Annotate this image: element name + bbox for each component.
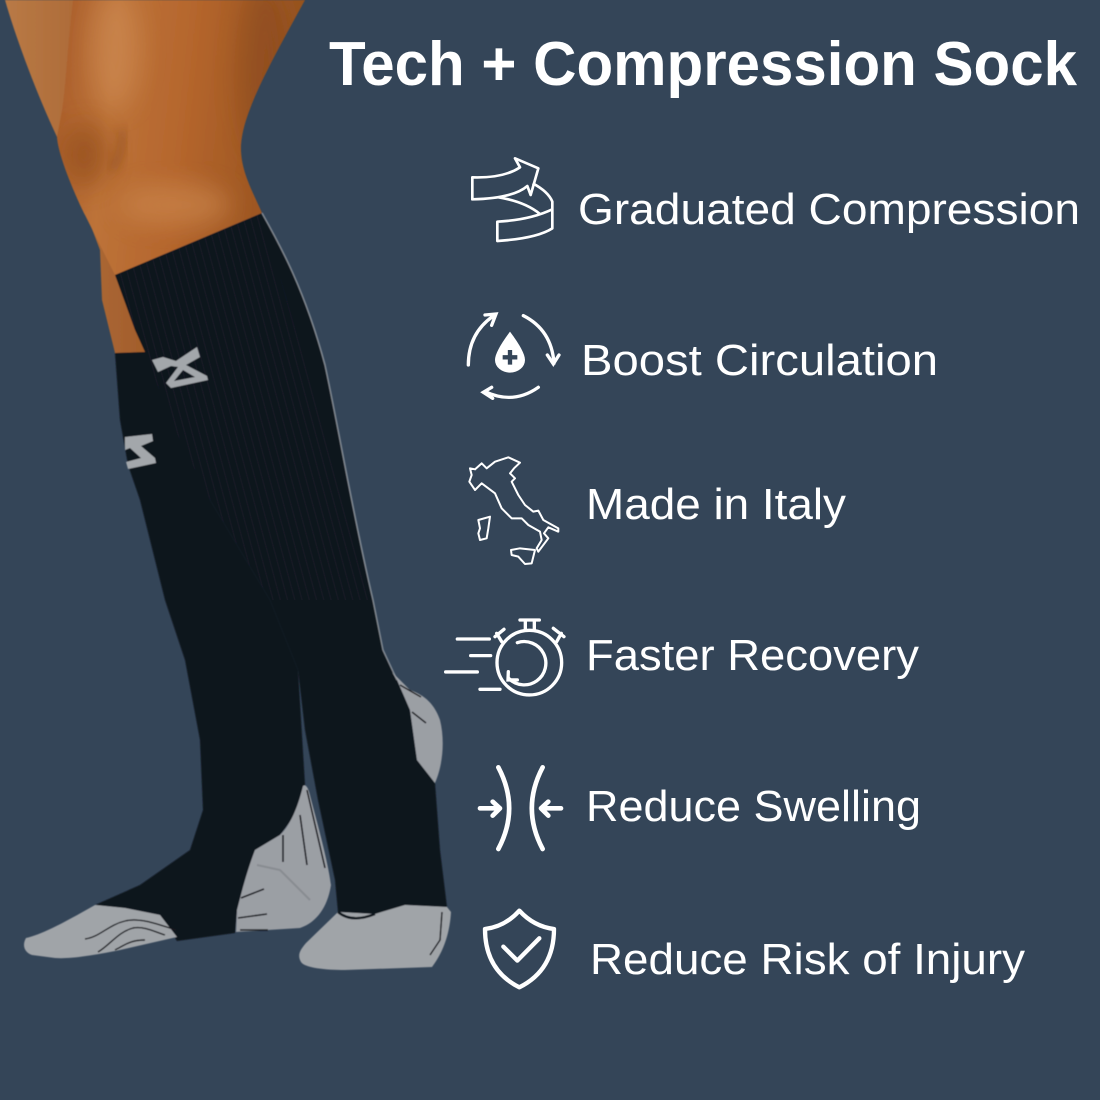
- front foot toe: [299, 905, 451, 970]
- label: made in italy: Made in Italy: [586, 480, 846, 529]
- feature: reduce risk of injury: [485, 911, 1025, 987]
- feature: faster recovery: [446, 620, 919, 695]
- feature: boost circulation: [468, 314, 938, 398]
- label: boost circulation: Boost Circulation: [581, 336, 938, 385]
- feature: graduated compression: [472, 158, 1080, 241]
- icon: shield with check: [485, 911, 554, 987]
- label: reduce swelling: Reduce Swelling: [586, 782, 921, 831]
- icon: inward arrows and curves: [480, 767, 561, 849]
- front sock: [115, 213, 447, 914]
- back leg skin: [5, 0, 160, 353]
- label: faster recovery: Faster Recovery: [586, 631, 919, 680]
- knit ribs: [115, 213, 373, 600]
- back sock: [95, 352, 305, 941]
- icon: stopwatch with speed lines: [446, 620, 564, 695]
- icon: map of italy: [469, 457, 558, 564]
- front foot heel: [392, 672, 443, 783]
- icon: graduated compression arrow band: [472, 158, 552, 241]
- photo: legs wearing compression socks: [5, 0, 451, 970]
- front leg skin: [57, 0, 305, 275]
- icon: blood drop with circulating arrows: [468, 314, 559, 398]
- back foot heel: [236, 785, 331, 932]
- feature: made in italy: [469, 457, 846, 564]
- label: graduated compression: Graduated Compression: [578, 185, 1080, 234]
- title: Tech + Compression Sock: [329, 30, 1077, 99]
- label: reduce risk of injury: Reduce Risk of Injury: [590, 935, 1025, 984]
- logo on front sock: [152, 347, 208, 388]
- logo on back sock: [125, 434, 156, 469]
- back foot toe: [24, 905, 177, 958]
- feature: reduce swelling: [480, 767, 921, 849]
